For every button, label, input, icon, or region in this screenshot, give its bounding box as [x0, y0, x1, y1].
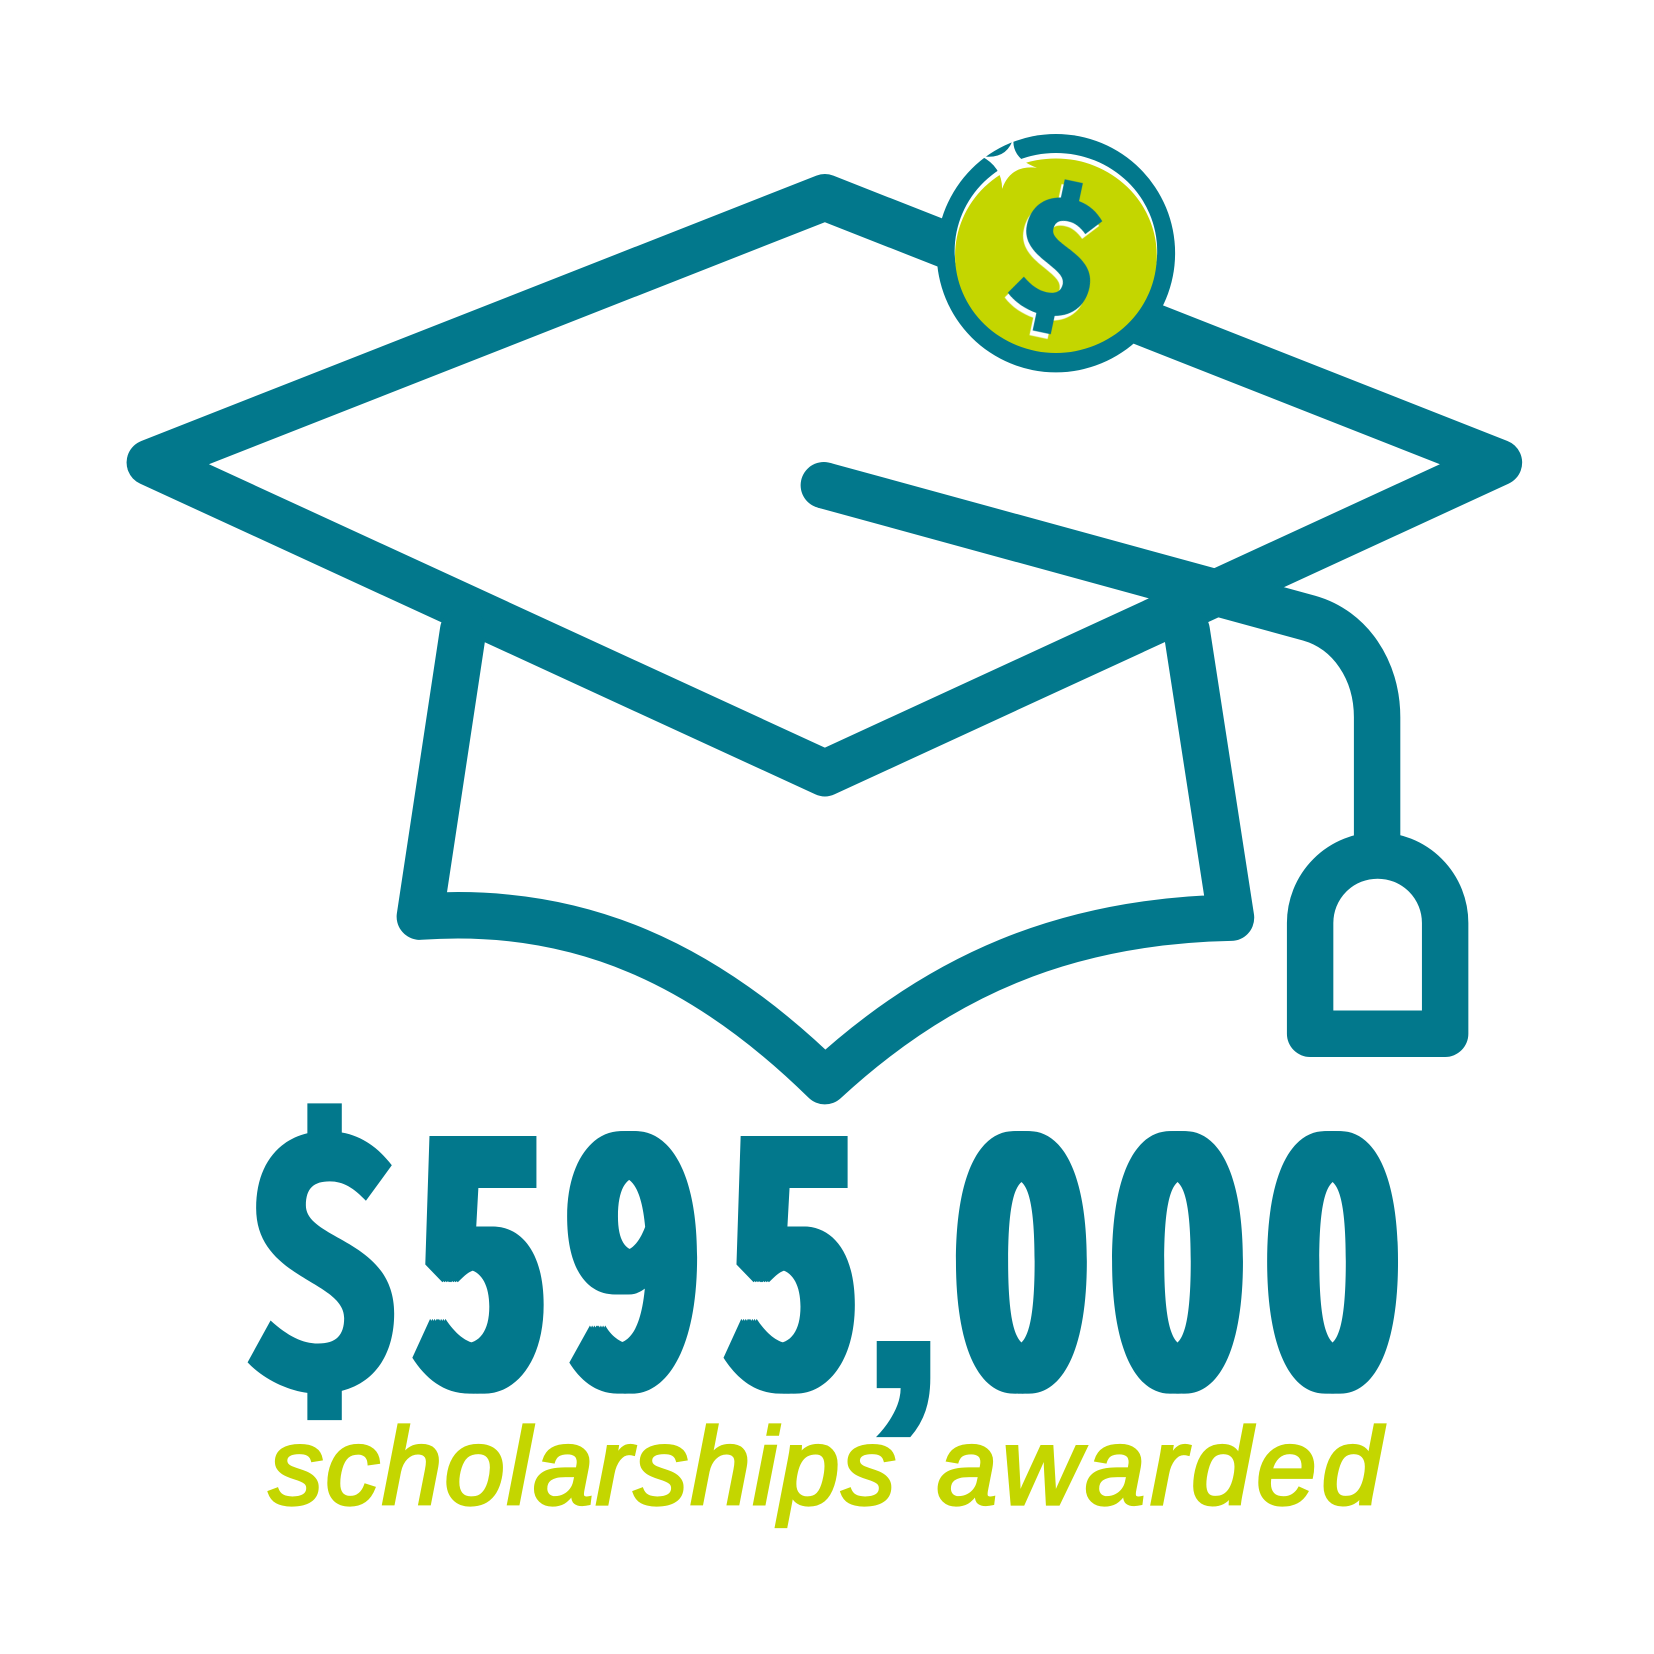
- amount: $595,000: ,: [850, 1103, 956, 1456]
- amount: $595,000: 0: [1111, 985, 1244, 1490]
- amount: $595,000: 9: [566, 985, 700, 1490]
- cap base: [420, 631, 1231, 1081]
- coin highlight edge: [955, 153, 1157, 349]
- amount: $595,000: $: [235, 985, 414, 1490]
- sparkle: [981, 137, 1037, 189]
- mortarboard top: [150, 197, 1499, 773]
- coin face: [955, 158, 1157, 353]
- amount: $595,000: 0: [955, 985, 1088, 1490]
- tassel cord: [824, 485, 1377, 844]
- cord round start: [801, 462, 847, 508]
- coin ring: [937, 134, 1175, 372]
- amount: $595,000: 5: [414, 985, 548, 1490]
- amount: $595,000: 0: [1266, 985, 1399, 1490]
- amount: $595,000: [126, 136, 1520, 1490]
- tassel: [1310, 855, 1445, 1034]
- amount: $595,000: 5: [725, 985, 859, 1490]
- subtitle: scholarships awarded: scholarships: [269, 1407, 898, 1528]
- graduation cap: [150, 197, 1499, 1081]
- dollar sign: $: [989, 123, 1131, 368]
- subtitle: scholarships awarded: awarded: [937, 1407, 1387, 1528]
- icon: dollar coin: [937, 123, 1175, 372]
